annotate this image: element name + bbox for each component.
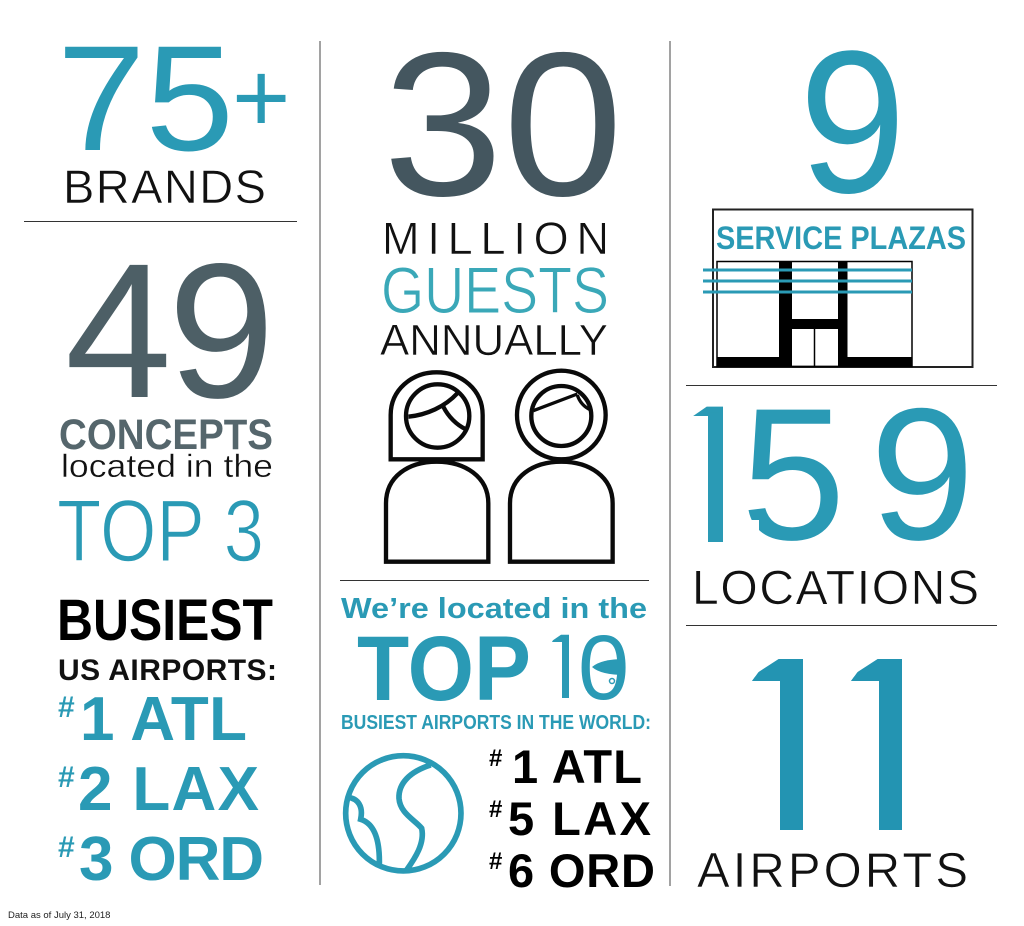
- label: 10 with plane: 0: [578, 617, 629, 719]
- stat: 30 million guests annually: MILLION: [382, 213, 609, 264]
- stat: 49 concepts: 49: [65, 223, 275, 438]
- list: world airport rankings: [489, 740, 655, 897]
- stat: 49 concepts: CONCEPTS: [59, 411, 273, 459]
- label: service plazas: SERVICE PLAZAS: [716, 220, 966, 256]
- stat: 159 locations: 5: [741, 369, 846, 579]
- icon: globe: [346, 756, 461, 871]
- list: US airport rankings: 1 ATL: [80, 685, 247, 754]
- list: US airport rankings: #: [58, 691, 75, 724]
- stat: 75+ brands: 75: [57, 14, 234, 182]
- stat: 75+ brands: BRANDS: [63, 160, 266, 213]
- stat: 159 locations: LOCATIONS: [692, 562, 979, 615]
- stat: 159 locations: 9: [870, 369, 975, 579]
- stat: 159 locations: 1: [659, 369, 764, 579]
- list: US airport rankings: #: [58, 761, 75, 794]
- list: US airport rankings: [58, 685, 264, 894]
- heading: located in the top 10: We’re located in the: [341, 593, 647, 625]
- list: world airport rankings: 5 LAX: [508, 792, 651, 845]
- heading: busiest US airports: US AIRPORTS:: [58, 654, 277, 687]
- heading: top 3: TOP 3: [57, 481, 264, 580]
- heading: busiest US airports: BUSIEST: [57, 588, 273, 653]
- list: world airport rankings: #: [489, 745, 502, 772]
- footnote: Data as of July 31, 2018: [8, 910, 110, 921]
- stat: 11 airports: 11: [722, 605, 959, 883]
- heading: located in the top 10: [341, 593, 651, 734]
- list: US airport rankings: 2 LAX: [78, 755, 259, 824]
- stat: 30 million guests annually: ANNUALLY: [380, 316, 608, 365]
- label: 10 with plane: [552, 634, 626, 700]
- stat: 30 million guests annually: [380, 10, 623, 365]
- stat: 9: 9: [799, 9, 906, 236]
- heading: located in the top 10: TOP: [357, 618, 531, 720]
- stat: 159 locations: [693, 406, 976, 604]
- stat: 30 million guests annually: GUESTS: [381, 253, 609, 327]
- list: world airport rankings: #: [489, 848, 502, 875]
- heading: busiest US airports: [57, 588, 277, 687]
- heading: located in the top 10: BUSIEST AIRPORTS IN THE WORLD:: [341, 712, 651, 734]
- icon: service plaza building: [703, 210, 972, 367]
- list: world airport rankings: #: [489, 796, 502, 823]
- stat: 11 airports: AIRPORTS: [697, 844, 968, 898]
- stat: 49 concepts: located in the: [61, 448, 273, 484]
- stat: 75+ brands: +: [232, 42, 290, 154]
- stat: 75+ brands: [57, 14, 290, 213]
- list: US airport rankings: 3 ORD: [79, 825, 264, 894]
- stat: 30 million guests annually: 30: [383, 10, 623, 239]
- list: world airport rankings: 1 ATL: [512, 740, 642, 793]
- list: US airport rankings: #: [58, 831, 75, 864]
- list: world airport rankings: 6 ORD: [508, 844, 655, 897]
- label: 10 with plane: 1: [538, 617, 589, 719]
- icon: two people: [386, 371, 613, 562]
